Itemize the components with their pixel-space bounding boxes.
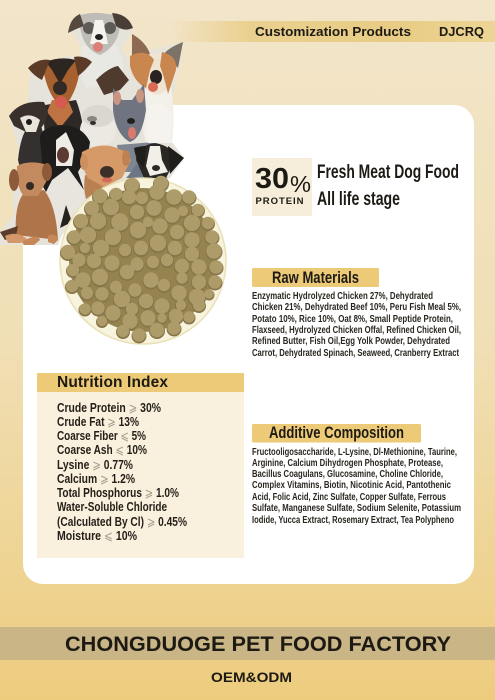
nutrition values: Coarse Ash ⩽ 10% bbox=[57, 442, 147, 458]
dog group silhouette bbox=[0, 14, 184, 245]
nutrition values: Water-Soluble Chloride bbox=[57, 499, 167, 514]
nutrition values: Crude Fat ⩾ 13% bbox=[57, 414, 139, 430]
dog: grey shepherd bbox=[113, 84, 154, 172]
product subtitle: All life stage bbox=[317, 189, 400, 210]
protein badge bbox=[252, 158, 312, 216]
nutrition values: (Calculated By Cl) ⩾ 0.45% bbox=[57, 514, 187, 530]
dog: dark left bbox=[9, 102, 52, 168]
protein label: PROTEIN bbox=[256, 196, 304, 207]
raw materials section bbox=[252, 268, 461, 359]
kibble shadow base bbox=[69, 188, 217, 332]
bowl of kibble bbox=[60, 176, 226, 344]
dog: orange and white bbox=[130, 34, 184, 143]
nutrition values: Coarse Fiber ⩽ 5% bbox=[57, 428, 146, 444]
dog: tan retriever bbox=[80, 145, 131, 199]
footer tagline: OEM&ODM bbox=[211, 670, 292, 685]
additive text bbox=[252, 446, 461, 526]
header text: brand code: DJCRQ bbox=[439, 25, 484, 39]
nutrition heading: Nutrition Index bbox=[57, 374, 168, 391]
nutrition values: Moisture ⩽ 10% bbox=[57, 528, 137, 544]
footer band bbox=[0, 627, 495, 660]
factory name: CHONGDUOGE PET FOOD FACTORY bbox=[65, 633, 451, 656]
percent sign: % bbox=[290, 171, 311, 197]
nutrition values: Calcium ⩾ 1.2% bbox=[57, 471, 135, 487]
illustration: group of dogs bbox=[0, 13, 184, 245]
protein value: 30 bbox=[255, 163, 289, 195]
nutrition values: Crude Protein ⩾ 30% bbox=[57, 400, 161, 416]
dog: top grey and white bbox=[68, 13, 133, 88]
nutrition values: Total Phosphorus ⩾ 1.0% bbox=[57, 485, 179, 501]
nutrition heading bar bbox=[37, 373, 244, 392]
header band bbox=[170, 21, 495, 42]
main white panel bbox=[23, 105, 474, 584]
additive heading bar bbox=[252, 424, 421, 442]
dog: black and tan bbox=[28, 57, 92, 145]
dog: black and white centre bbox=[40, 125, 90, 240]
white chest of orange dog bbox=[146, 104, 172, 143]
raw materials heading: Raw Materials bbox=[272, 269, 359, 287]
raw materials text bbox=[252, 290, 461, 359]
raw materials text: Enzymatic Hydrolyzed Chicken 27%, Dehydrated bbox=[252, 290, 433, 302]
nutrition values bbox=[57, 400, 187, 544]
dog: small white bbox=[80, 105, 116, 147]
nutrition values: Lysine ⩾ 0.77% bbox=[57, 457, 133, 473]
dog: tricolour bbox=[126, 143, 184, 178]
nutrition index panel bbox=[37, 373, 244, 558]
additive composition section bbox=[252, 424, 461, 526]
additive heading: Additive Composition bbox=[269, 424, 404, 442]
plate bbox=[60, 178, 226, 344]
kibble pieces bbox=[60, 176, 224, 344]
dog: brown puppy bbox=[0, 162, 58, 245]
header text: customization products: Customization Products bbox=[255, 25, 411, 39]
raw materials heading bar bbox=[252, 268, 379, 287]
product title bbox=[317, 162, 459, 210]
dog: brown messy tuft bbox=[96, 66, 129, 95]
kibble highlights bbox=[62, 176, 222, 341]
